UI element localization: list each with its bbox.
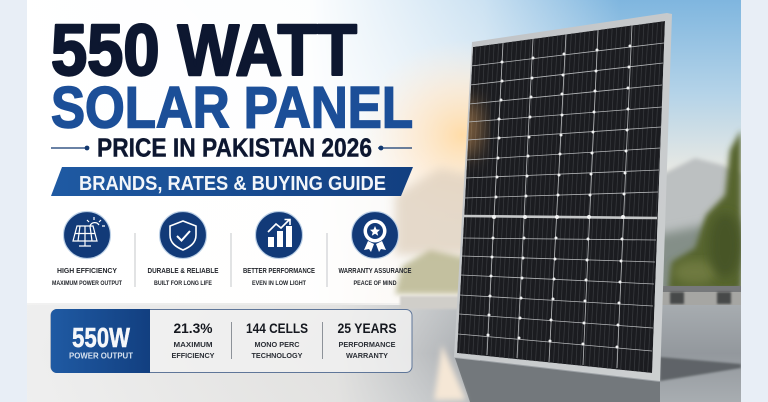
label: high efficiency: HIGH EFFICIENCY (57, 266, 117, 275)
icon: solar panel with sun (64, 212, 110, 258)
stat: 25 years performance warranty: PERFORMANCE (338, 340, 396, 349)
icon: award rosette with star (352, 212, 398, 258)
stat: 550W power output: 550W (72, 322, 130, 353)
stat: 21.3% maximum efficiency: EFFICIENCY (172, 351, 215, 360)
strip background (51, 310, 412, 372)
stat: 144 cells mono perc technology: TECHNOLOGY (252, 351, 303, 360)
stat: 144 cells mono perc technology (246, 320, 308, 360)
stat: 144 cells mono perc technology: 144 CELLS (246, 320, 308, 336)
title: SOLAR PANEL: SOLAR PANEL (51, 76, 413, 140)
panel cells (457, 21, 665, 373)
banner: brands, rates and buying guide: BRANDS, RATES & BUYING GUIDE (79, 172, 386, 195)
sublabel: maximum power output: MAXIMUM POWER OUTPUT (52, 280, 122, 287)
icon: shield with check (160, 212, 206, 258)
sublabel: peace of mind: PEACE OF MIND (354, 280, 397, 287)
stat: 21.3% maximum efficiency: 21.3% (174, 320, 213, 336)
feature: high efficiency (52, 212, 122, 287)
stat: 21.3% maximum efficiency: MAXIMUM (174, 340, 213, 349)
stat: 21.3% maximum efficiency (172, 320, 215, 360)
stat: 550W power output (51, 309, 150, 373)
divider (230, 233, 232, 287)
sublabel: built for long life: BUILT FOR LONG LIFE (154, 280, 212, 287)
feature: durable and reliable (148, 212, 219, 287)
title: 550 WATT: 550 WATT (51, 11, 357, 91)
icon: rising bar chart (256, 212, 302, 258)
stat: 550W power output: POWER OUTPUT (69, 352, 133, 360)
panel busbar lines (458, 25, 664, 368)
divider (322, 322, 323, 359)
divider (134, 233, 136, 287)
stat: 25 years performance warranty: 25 YEARS (338, 320, 396, 336)
solar panel (445, 13, 685, 381)
panel junction dots (486, 44, 632, 348)
divider (231, 322, 232, 359)
label: better performance: BETTER PERFORMANCE (243, 266, 315, 275)
divider (326, 233, 328, 287)
subtitle with side rules: PRICE IN PAKISTAN 2026 (97, 134, 372, 162)
stat: 25 years performance warranty (338, 320, 396, 360)
label: durable and reliable: DURABLE & RELIABLE (148, 266, 219, 275)
panel: specification strip (51, 309, 412, 373)
sublabel: even in low light: EVEN IN LOW LIGHT (252, 280, 306, 287)
stat: 25 years performance warranty: WARRANTY (346, 351, 388, 360)
stat: 144 cells mono perc technology: MONO PERC (254, 340, 300, 349)
feature: warranty assurance (338, 212, 412, 287)
panel frame (454, 13, 672, 381)
label: warranty assurance: WARRANTY ASSURANCE (338, 266, 412, 275)
feature: better performance (243, 212, 315, 287)
